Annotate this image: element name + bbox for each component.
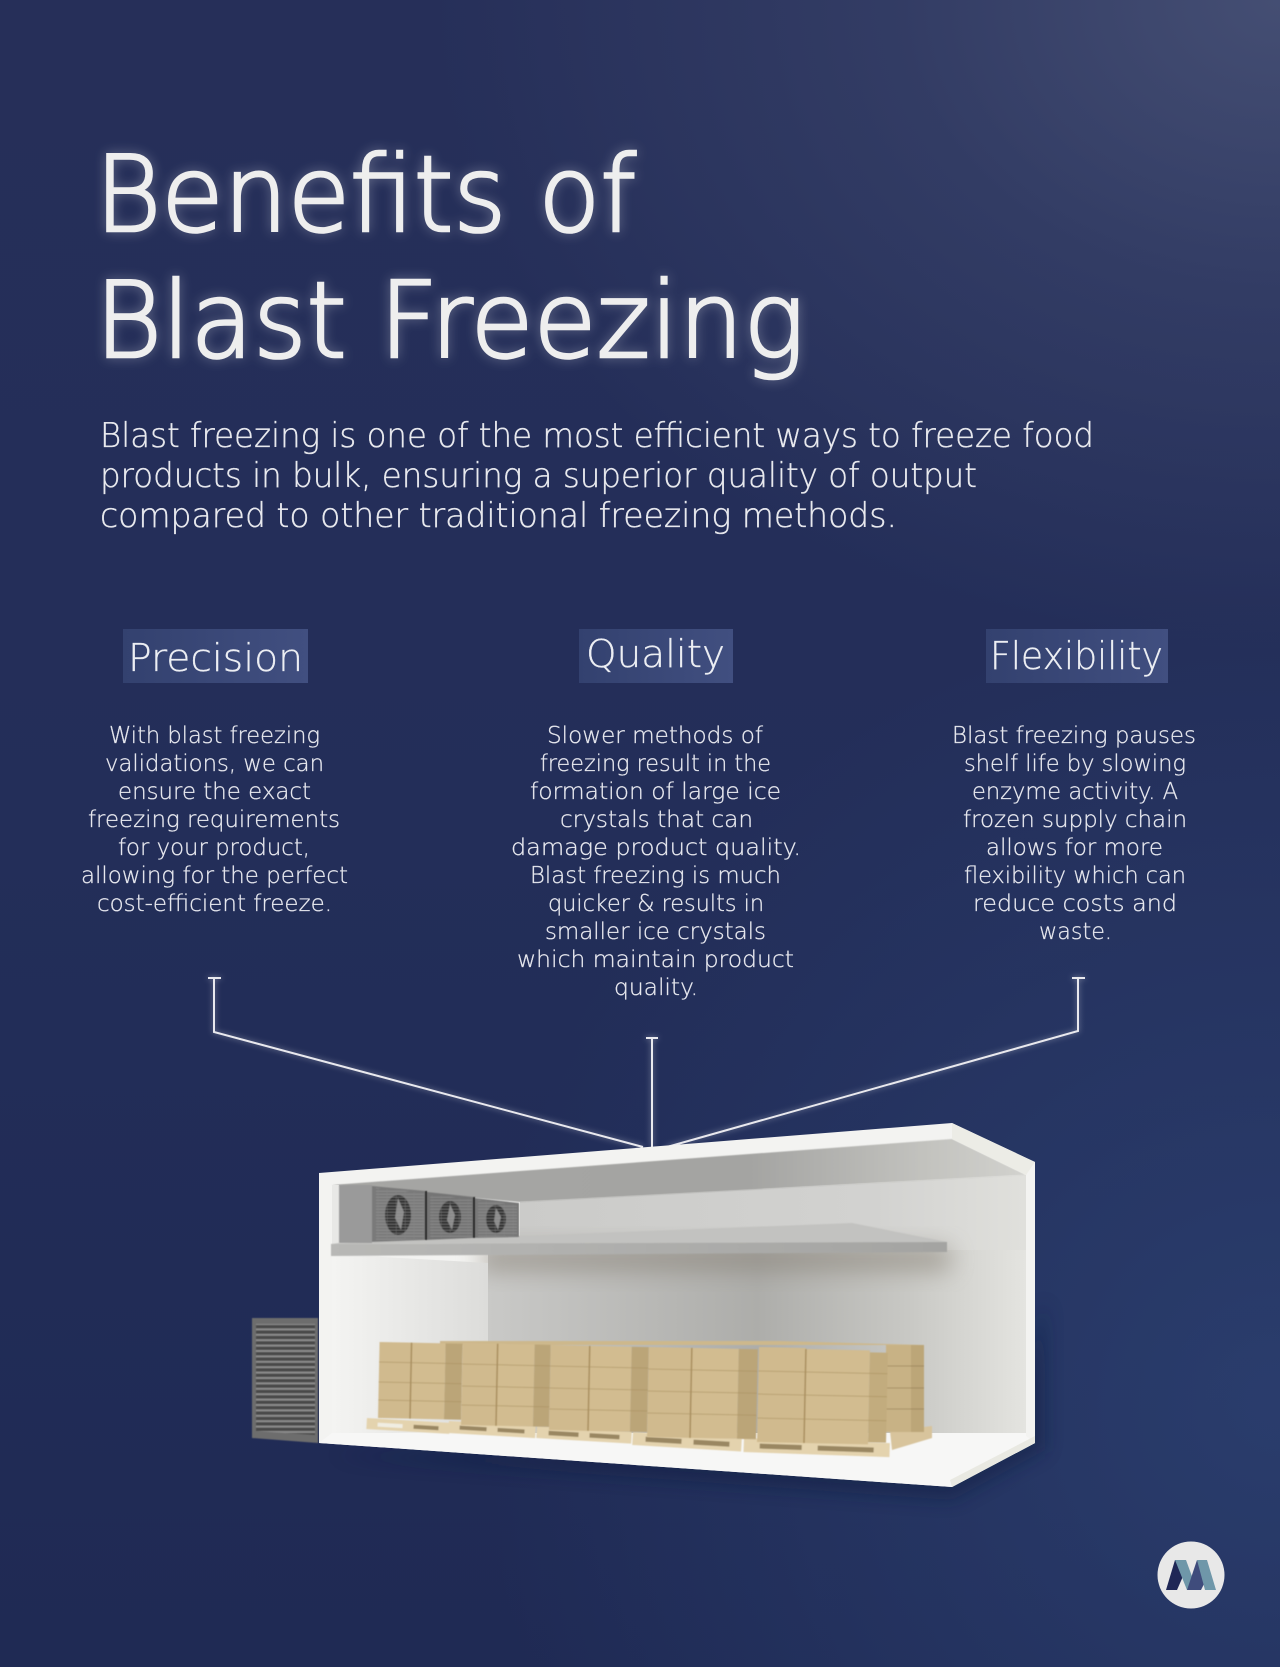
pallet 4 [632,1432,742,1451]
text: flexibility: enzyme activity. A [972,777,1178,805]
text: precision: ensure the exact [118,777,311,805]
pallet 1 [366,1418,450,1434]
text: quality: quicker & results in [548,889,764,917]
intro paragraph: products in bulk, ensuring a superior quality of output [100,456,977,496]
intro paragraph [100,416,1094,536]
connector lines [208,978,1085,1147]
icon: company logo [1158,1542,1224,1608]
text: quality [511,721,801,1001]
text: flexibility: waste. [1039,917,1112,945]
fan 1 [372,1186,426,1242]
left wall top piece [332,1185,339,1244]
text: quality: which maintain product [517,945,794,973]
cold room illustration [252,1123,1045,1500]
text: flexibility: shelf life by slowing [964,749,1186,777]
left wall [332,1254,488,1435]
pallet 2 [448,1421,536,1438]
stack 1 [378,1342,463,1420]
text: precision: With blast freezing [109,721,320,749]
stack 5 [757,1347,888,1445]
arrow: flexibility connector [667,978,1085,1147]
text: flexibility: reduce costs and [973,889,1177,917]
text: quality: crystals that can [560,805,753,833]
heading: precision: Precision [128,636,303,680]
ceiling underside [332,1139,1026,1202]
shelf front [331,1242,947,1256]
pallet 5 [744,1438,890,1457]
text: flexibility: allows for more [986,833,1163,861]
text: precision: allowing for the perfect [81,861,348,889]
intro paragraph: Blast freezing is one of the most efficient ways to freeze food [100,416,1094,456]
text: flexibility: flexibility which can [964,861,1186,889]
intro paragraph: compared to other traditional freezing methods. [100,496,897,536]
cardboard boxes [378,1341,924,1445]
text: quality: formation of large ice [530,777,781,805]
evaporator fan unit [339,1185,519,1243]
heading: flexibility: Flexibility [990,634,1163,678]
stack 2 [461,1343,551,1427]
text: precision: cost-efficient freeze. [97,889,332,917]
text: flexibility [952,721,1196,945]
exterior vent [252,1318,318,1443]
panel: precision [81,629,348,917]
pallet 5 side [890,1426,932,1450]
title: Blast Freezing [95,260,805,382]
title: Benefits of [95,134,636,256]
container shell [319,1123,1035,1487]
arrow: quality connector [646,1038,658,1147]
text: precision: freezing requirements [88,805,340,833]
text: quality: smaller ice crystals [545,917,766,945]
ceiling right edge [952,1123,1035,1175]
box tops [440,1341,924,1345]
text: quality: Slower methods of [547,721,764,749]
fan 3 [475,1198,519,1238]
arrow: precision connector [208,978,643,1147]
text: flexibility: Blast freezing pauses [952,721,1196,749]
panel: quality [511,629,801,1001]
text: quality: freezing result in the [540,749,771,777]
floor [319,1433,1035,1487]
heading: quality: Quality [586,632,725,676]
pallet 3 [536,1426,632,1444]
text: quality: quality. [614,973,698,1001]
shelf top [331,1223,947,1244]
under-shelf shadow [480,1248,950,1270]
container shadow [330,1300,1045,1500]
text: quality: damage product quality. [511,833,801,861]
shelf [331,1223,947,1256]
stack 3 [549,1345,649,1432]
text: quality: Blast freezing is much [530,861,781,889]
text: precision: validations, we can [105,749,324,777]
fan 2 [427,1192,474,1240]
lower back wall [488,1250,1026,1437]
text: precision: for your product, [118,833,310,861]
floor right edge [950,1436,1035,1487]
back stack [886,1345,924,1432]
pallets [366,1418,932,1457]
text: precision [81,721,348,917]
stack 4 [647,1347,758,1439]
panel: flexibility [952,629,1196,945]
unit body [339,1185,372,1243]
text: flexibility: frozen supply chain [963,805,1187,833]
title [95,134,805,382]
upper back wall [520,1175,1026,1260]
